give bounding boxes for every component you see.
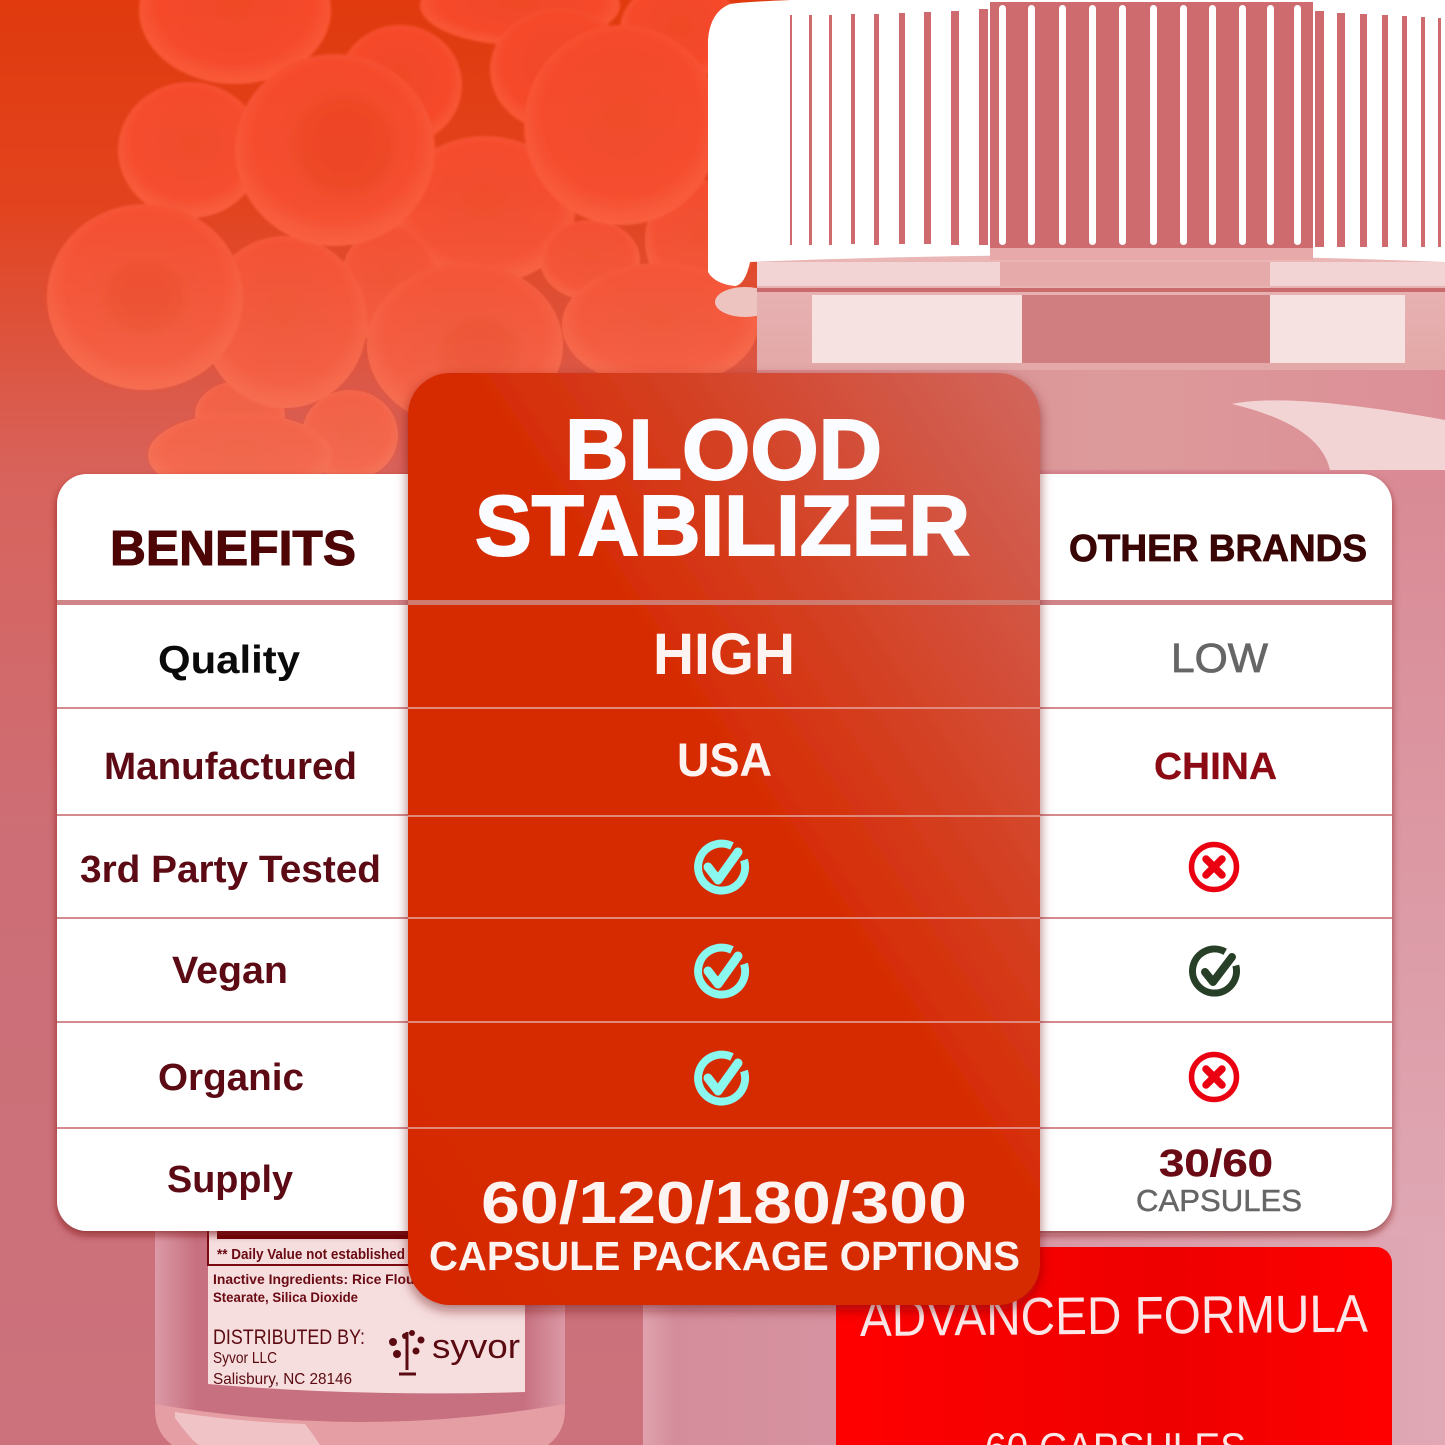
package counts: 60/120/180/300 bbox=[481, 1170, 967, 1236]
bottom left bottle bbox=[155, 1225, 565, 1445]
icon: cyan check bbox=[698, 948, 745, 995]
title: STABILIZER bbox=[475, 479, 970, 574]
bottle label: Stearate, Silica Dioxide bbox=[213, 1290, 358, 1305]
bottle cap bbox=[708, 0, 1445, 286]
package caption: CAPSULE PACKAGE OPTIONS bbox=[429, 1233, 1020, 1279]
capsules caption: CAPSULES bbox=[1136, 1183, 1302, 1218]
bottle label: Syvor LLC bbox=[213, 1350, 277, 1367]
icon: red cross bbox=[1192, 844, 1236, 890]
advanced formula text: ADVANCED FORMULA bbox=[860, 1285, 1369, 1348]
right side bottle body bbox=[1040, 470, 1445, 1250]
vegan label: Vegan bbox=[172, 950, 288, 992]
bottom right bottle bbox=[643, 1235, 1445, 1445]
distributor: DISTRIBUTED BY: bbox=[213, 1326, 365, 1349]
manufactured label: Manufactured bbox=[104, 746, 357, 788]
other brands heading: OTHER BRANDS bbox=[1069, 528, 1367, 570]
icon: red cross bbox=[1192, 1054, 1236, 1100]
3rd party tested label: 3rd Party Tested bbox=[80, 849, 381, 891]
organic label: Organic bbox=[158, 1057, 304, 1099]
icon: cyan check bbox=[698, 844, 745, 891]
icon: dark green check bbox=[1193, 949, 1237, 993]
title: BLOOD bbox=[565, 403, 882, 498]
syvor logo: syvor bbox=[432, 1328, 520, 1366]
supply label: Supply bbox=[167, 1159, 293, 1201]
bottle label: Salisbury, NC 28146 bbox=[213, 1371, 352, 1388]
panel: blood stabilizer column bbox=[408, 373, 1040, 1305]
high value: HIGH bbox=[653, 622, 795, 687]
row dividers bbox=[57, 600, 437, 1129]
china value: CHINA bbox=[1154, 746, 1277, 788]
daily value note: ** Daily Value not established bbox=[217, 1247, 405, 1263]
icon: cyan check bbox=[698, 1055, 745, 1102]
syvor logo bbox=[389, 1328, 520, 1374]
quality label: Quality bbox=[158, 639, 300, 682]
bottle label bbox=[208, 1225, 525, 1393]
blood cells bbox=[46, 0, 757, 474]
title bbox=[475, 403, 970, 574]
supply value: 30/60 bbox=[1159, 1143, 1273, 1185]
bottle neck and shoulder bbox=[715, 255, 1445, 480]
red product label bbox=[836, 1247, 1392, 1445]
row dividers bbox=[408, 600, 1040, 1129]
low value: LOW bbox=[1171, 635, 1268, 681]
usa value: USA bbox=[677, 733, 772, 786]
panel: other brands column bbox=[1010, 474, 1392, 1231]
panel: benefits column bbox=[57, 474, 437, 1231]
benefits heading: BENEFITS bbox=[110, 522, 356, 576]
inactive ingredients: Inactive Ingredients: Rice Flour, bbox=[213, 1272, 423, 1287]
row dividers bbox=[1010, 600, 1392, 1129]
